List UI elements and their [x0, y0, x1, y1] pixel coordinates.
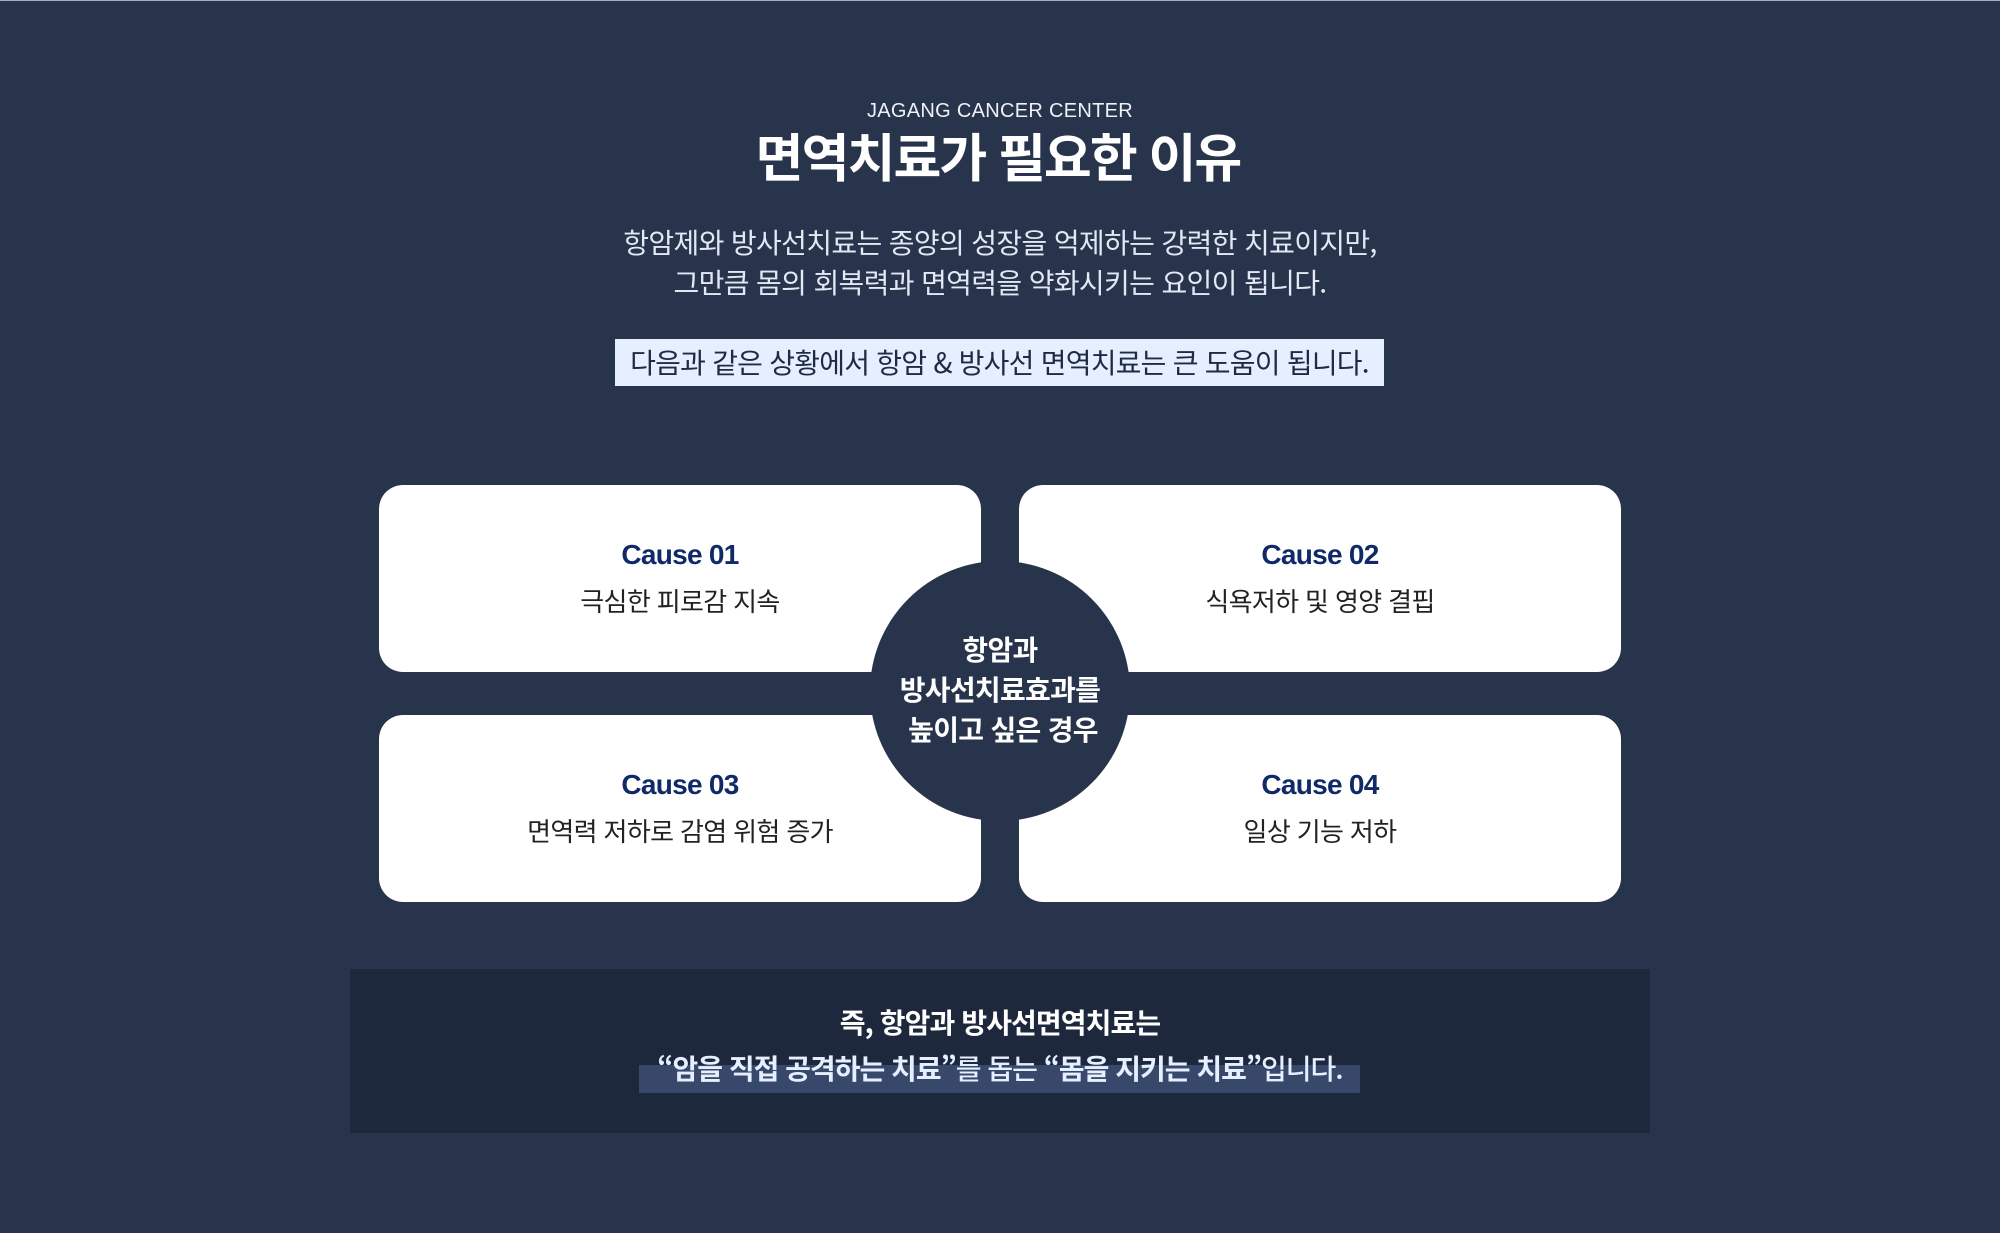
card: cause 03: [379, 715, 981, 902]
conclusion line 2: “암을 직접 공격하는 치료”를 돕는 “몸을 지키는 치료”입니다.: [657, 1048, 1343, 1088]
cause 02 text: 식욕저하 및 영양 결핍: [1205, 582, 1435, 619]
center circle: 항암과: [962, 629, 1038, 669]
cause 03 heading: Cause 03: [621, 769, 739, 800]
conclusion panel: [350, 969, 1650, 1133]
panel: causes diagram: [379, 485, 1621, 902]
card: cause 04: [1019, 715, 1621, 902]
eyebrow: center name: JAGANG CANCER CENTER: [867, 100, 1133, 122]
highlight bar: [639, 1065, 1360, 1093]
card: cause 01: [379, 485, 981, 672]
cause 02 heading: Cause 02: [1261, 539, 1379, 570]
intro text block: [623, 222, 1377, 302]
conclusion line 1: 즉, 항암과 방사선면역치료는: [840, 1002, 1160, 1042]
intro text block: 그만큼 몸의 회복력과 면역력을 약화시키는 요인이 됩니다.: [674, 262, 1326, 302]
title: 면역치료가 필요한 이유: [756, 117, 1240, 192]
cause 01 text: 극심한 피로감 지속: [580, 582, 780, 619]
cause 01 heading: Cause 01: [621, 539, 739, 570]
card: cause 02: [1019, 485, 1621, 672]
center circle: 방사선치료효과를: [900, 669, 1100, 709]
cause 03 text: 면역력 저하로 감염 위험 증가: [527, 812, 833, 849]
cause 04 heading: Cause 04: [1261, 769, 1379, 800]
cause 04 text: 일상 기능 저하: [1244, 812, 1396, 849]
intro text block: 항암제와 방사선치료는 종양의 성장을 억제하는 강력한 치료이지만,: [623, 222, 1377, 262]
center circle: 높이고 싶은 경우: [908, 709, 1098, 749]
highlighted statement: 다음과 같은 상황에서 항암 & 방사선 면역치료는 큰 도움이 됩니다.: [630, 342, 1369, 382]
center circle: [870, 561, 1130, 821]
